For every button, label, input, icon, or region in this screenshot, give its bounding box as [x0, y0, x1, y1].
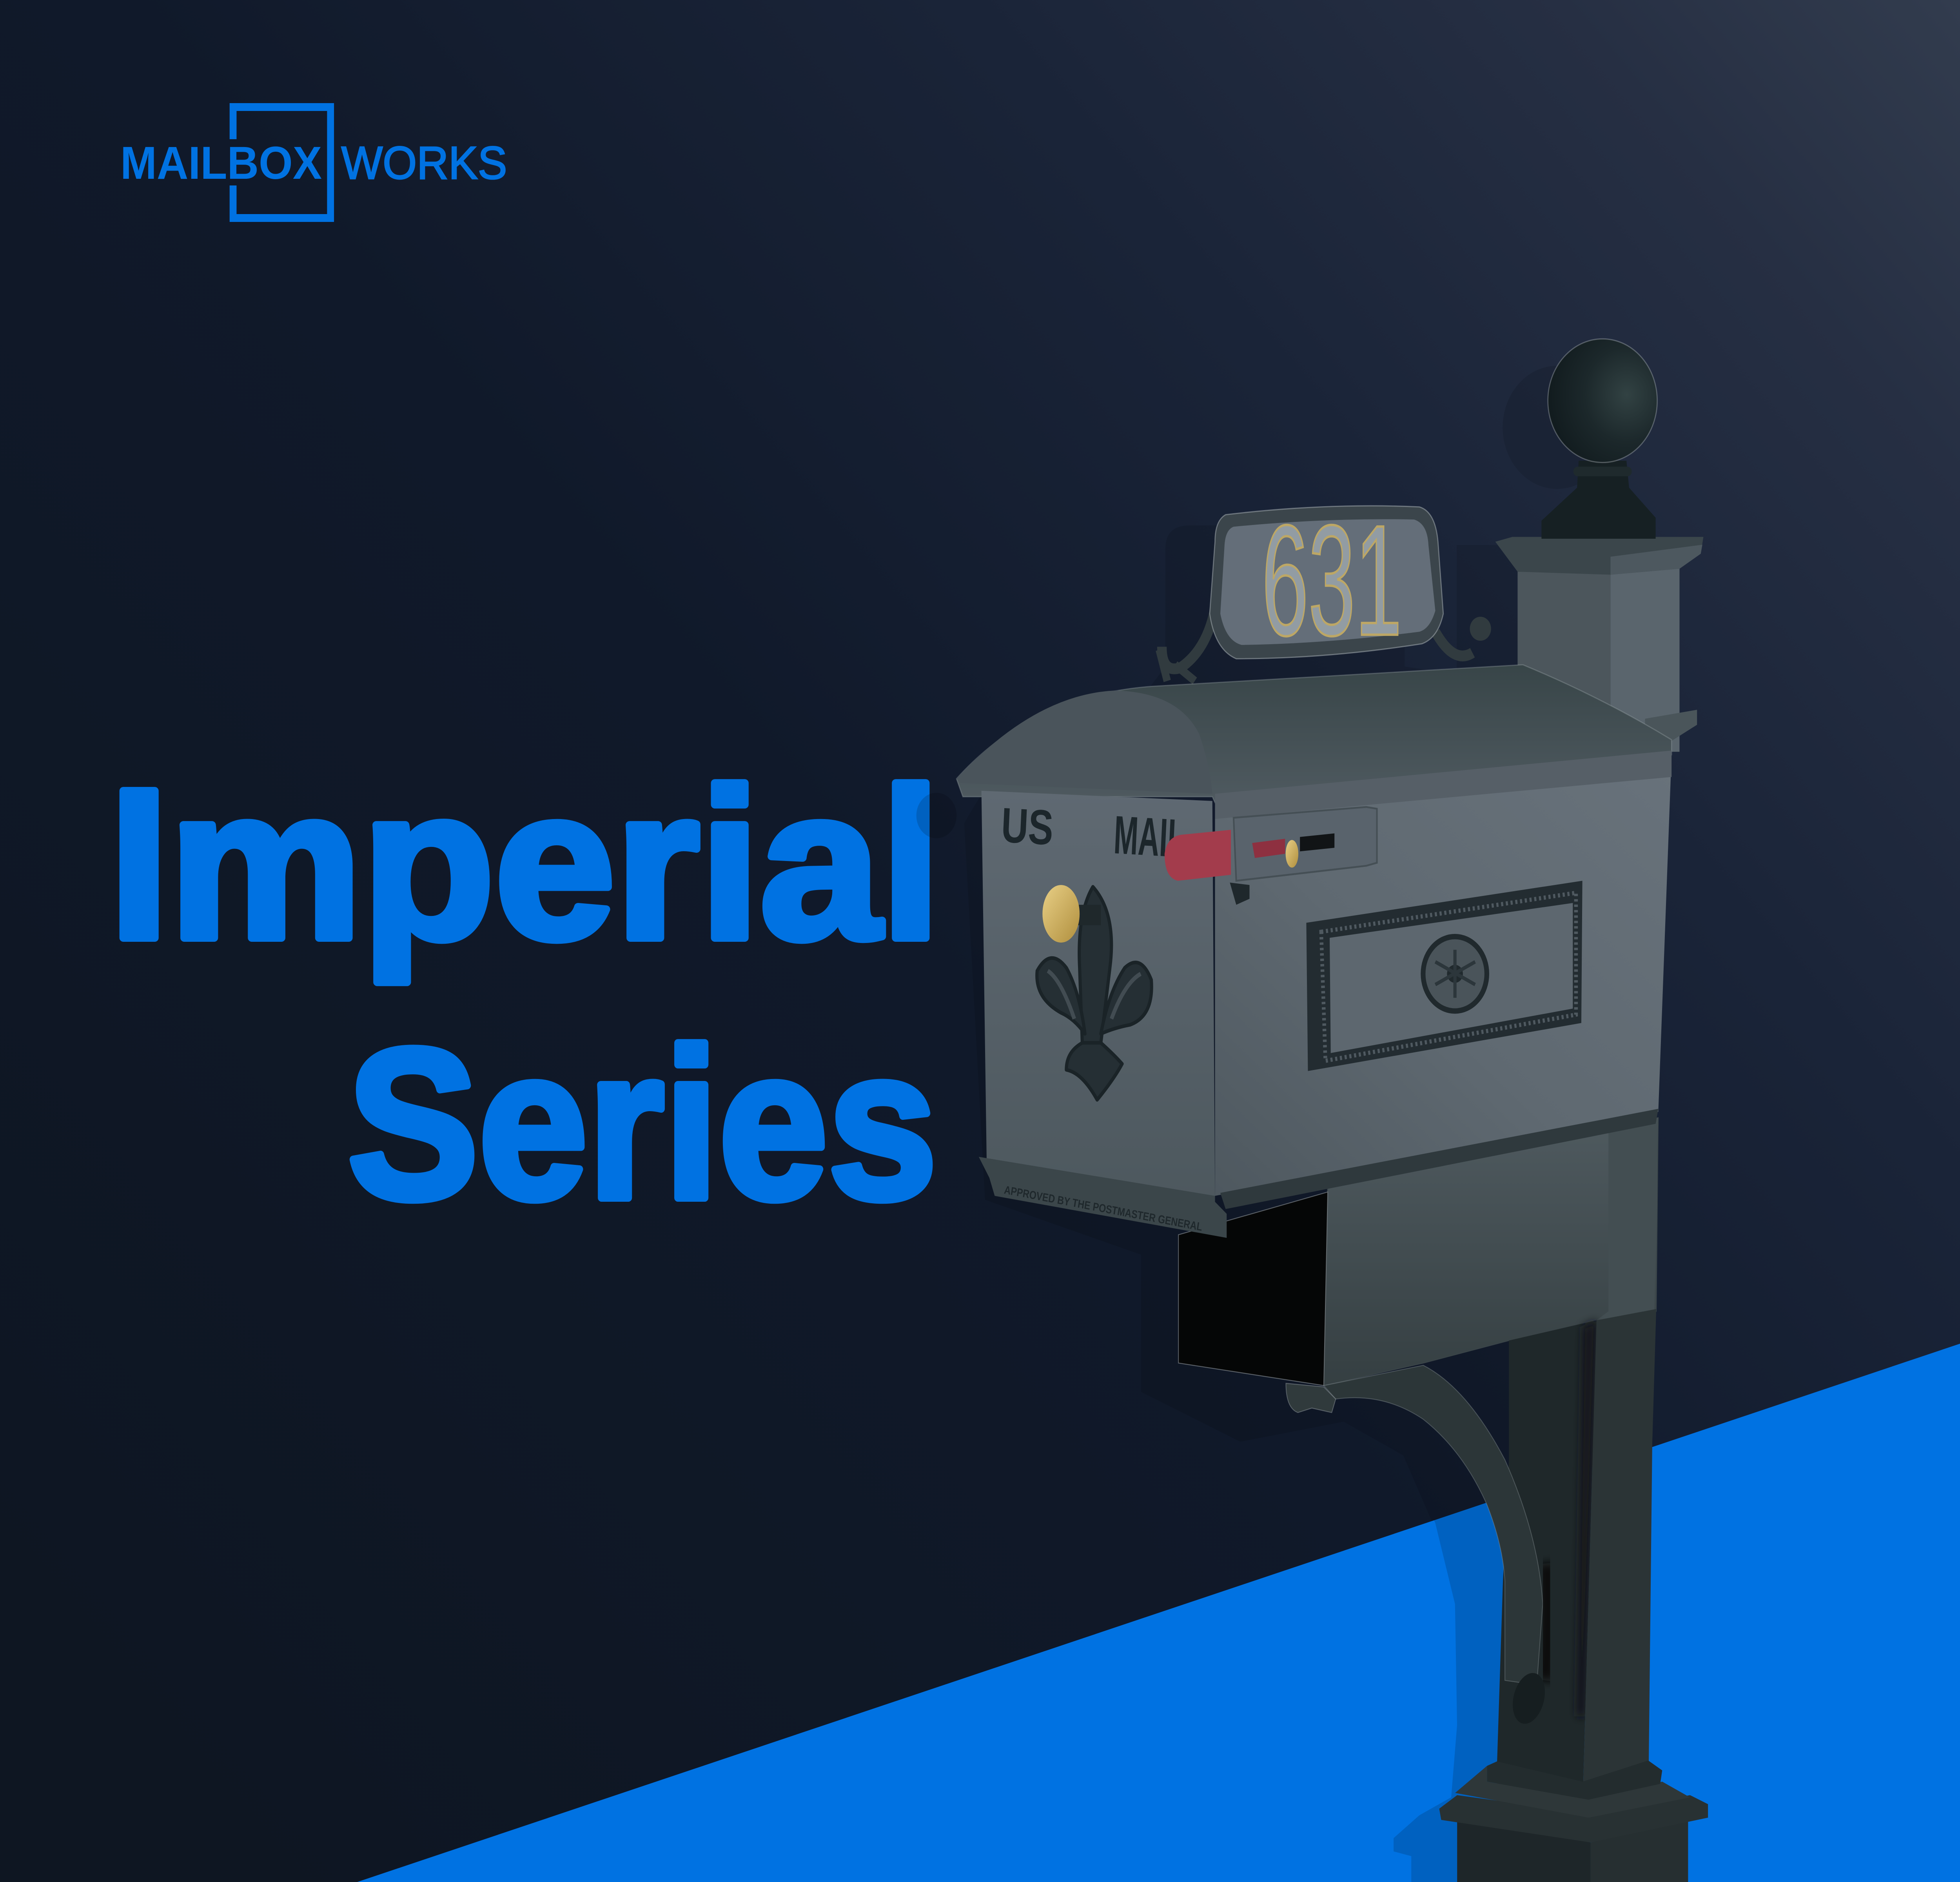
house number: 631: [1262, 493, 1402, 669]
post base rim: [1439, 1795, 1708, 1842]
product: mailbox on post: [956, 339, 1708, 1882]
door medallion: [1423, 937, 1487, 1011]
shadow notch on title letter: [916, 793, 956, 838]
MAIL lettering: MAIL: [1112, 804, 1187, 869]
finial ring: [1573, 467, 1632, 476]
plate frame: [1210, 506, 1443, 659]
post base foot right: [1590, 1820, 1688, 1882]
newspaper box side body: [1324, 1118, 1658, 1386]
medallion center: [1447, 965, 1463, 983]
outgoing slot plate: [1234, 807, 1377, 881]
post shaded inner edge: [1577, 1320, 1597, 1717]
fleur tuft: [1066, 1043, 1122, 1100]
slot opening: [1300, 833, 1334, 851]
bracket bolt: [1507, 1668, 1550, 1728]
newspaper box opening: [1178, 1192, 1328, 1386]
medallion spokes: [1436, 950, 1475, 998]
support bracket: [1324, 1365, 1543, 1685]
left base lip: [979, 1157, 1227, 1238]
knob head: [1042, 885, 1080, 943]
post top left face: [1517, 572, 1610, 752]
title line: Imperial: Imperial: [109, 745, 941, 985]
bracket foot: [1286, 1383, 1336, 1413]
front top band: [1215, 750, 1671, 819]
roof: [956, 665, 1671, 803]
product shadow on blue band: [1394, 1503, 1504, 1882]
address plate scroll right: [1436, 632, 1472, 656]
post upper right section: [1597, 1118, 1658, 1320]
base lip caption: APPROVED BY THE POSTMASTER GENERAL: [1004, 1183, 1203, 1233]
post side face: [1497, 1320, 1597, 1806]
address plate scroll left: [1162, 608, 1215, 669]
roof left dome: [956, 690, 1212, 794]
fleur-de-lis ornament: [1037, 887, 1152, 1100]
fleur petal streaks: [1048, 971, 1141, 1019]
collar under post: [1645, 710, 1697, 741]
door panel face: [1330, 903, 1573, 1053]
lower post and newspaper box: [1178, 1118, 1708, 1882]
finial neck: [1541, 461, 1656, 539]
fleur right petal: [1101, 963, 1152, 1034]
title line: Series: Series: [348, 1005, 937, 1244]
door panel: [1306, 881, 1583, 1071]
front base lip: [1220, 1109, 1658, 1209]
fleur center petal: [1079, 887, 1111, 1043]
finial ball: [1548, 339, 1657, 463]
flag bracket: [1230, 883, 1250, 905]
knob stem: [1074, 905, 1101, 925]
logo word: MAILBOX: MAILBOX: [120, 137, 322, 189]
post top right face: [1610, 569, 1679, 752]
title: Imperial Series: [109, 745, 941, 1244]
logo word: WORKS: WORKS: [341, 137, 507, 189]
upper mailbox: [956, 339, 1703, 1238]
US lettering: US: [1000, 798, 1054, 856]
post top cap: [1495, 537, 1703, 575]
post base middle step: [1455, 1766, 1690, 1818]
plate face: [1220, 519, 1436, 645]
address plate scroll left foot: [1159, 650, 1195, 681]
fleur left petal: [1037, 958, 1085, 1034]
blue diagonal band: [357, 1344, 1960, 1882]
left face: [982, 791, 1215, 1202]
slot brass knob: [1286, 840, 1298, 868]
logo square outline: [233, 107, 330, 218]
post front face: [1583, 1309, 1656, 1806]
brass door knob: [1042, 885, 1101, 943]
bracket shading: [1545, 1563, 1548, 1680]
post base collar: [1487, 1760, 1662, 1800]
address plate: [1210, 493, 1443, 669]
door panel bead: [1321, 893, 1576, 1061]
logo: Mailbox Works: [120, 107, 507, 218]
post base foot: [1457, 1818, 1590, 1882]
post cap right facet: [1610, 545, 1702, 575]
address plate scroll right knob: [1470, 617, 1491, 641]
door panel dark frame: [1306, 881, 1583, 1071]
product shadow on dark background: [964, 366, 1658, 1529]
slot red tab: [1252, 839, 1285, 858]
red flag: [1165, 830, 1231, 881]
front face: [1215, 755, 1671, 1196]
